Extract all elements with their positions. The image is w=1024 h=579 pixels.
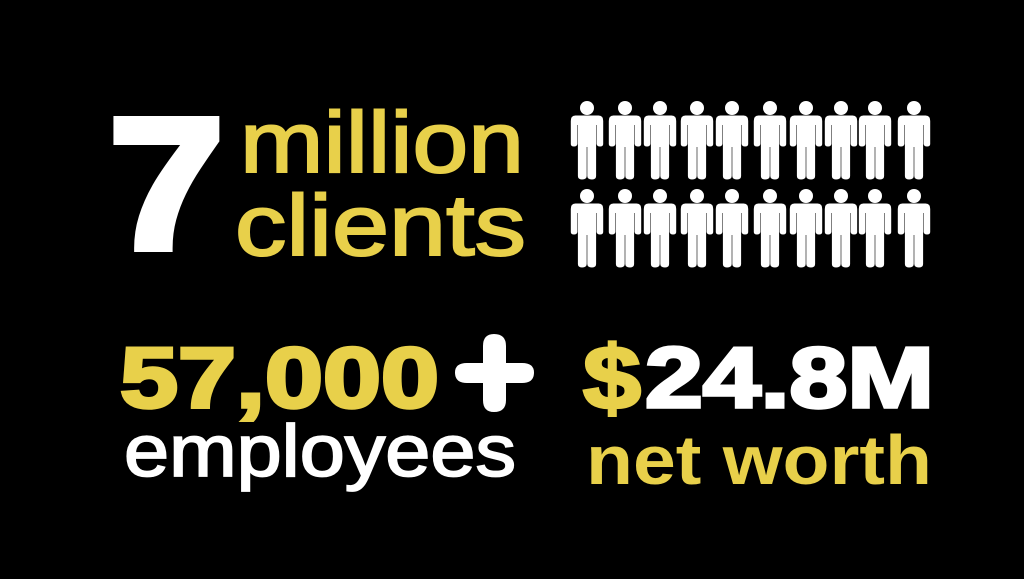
number 57,000: 57,000 [120, 331, 439, 426]
label: clients: clients [235, 178, 526, 274]
big number 7: 7 [109, 81, 224, 288]
dollar sign: $ [583, 329, 641, 429]
stat: 7 million clients [109, 81, 526, 288]
stat: $24.8M net worth [583, 329, 934, 499]
label: employees: employees [124, 411, 516, 492]
label: net worth: net worth [586, 421, 932, 499]
pictogram: rows of people [571, 101, 930, 268]
number 24.8M: 24.8M [645, 331, 934, 426]
stat: 57,000+ employees [120, 331, 534, 492]
label: million: million [240, 95, 524, 191]
icon: plus [455, 334, 534, 412]
